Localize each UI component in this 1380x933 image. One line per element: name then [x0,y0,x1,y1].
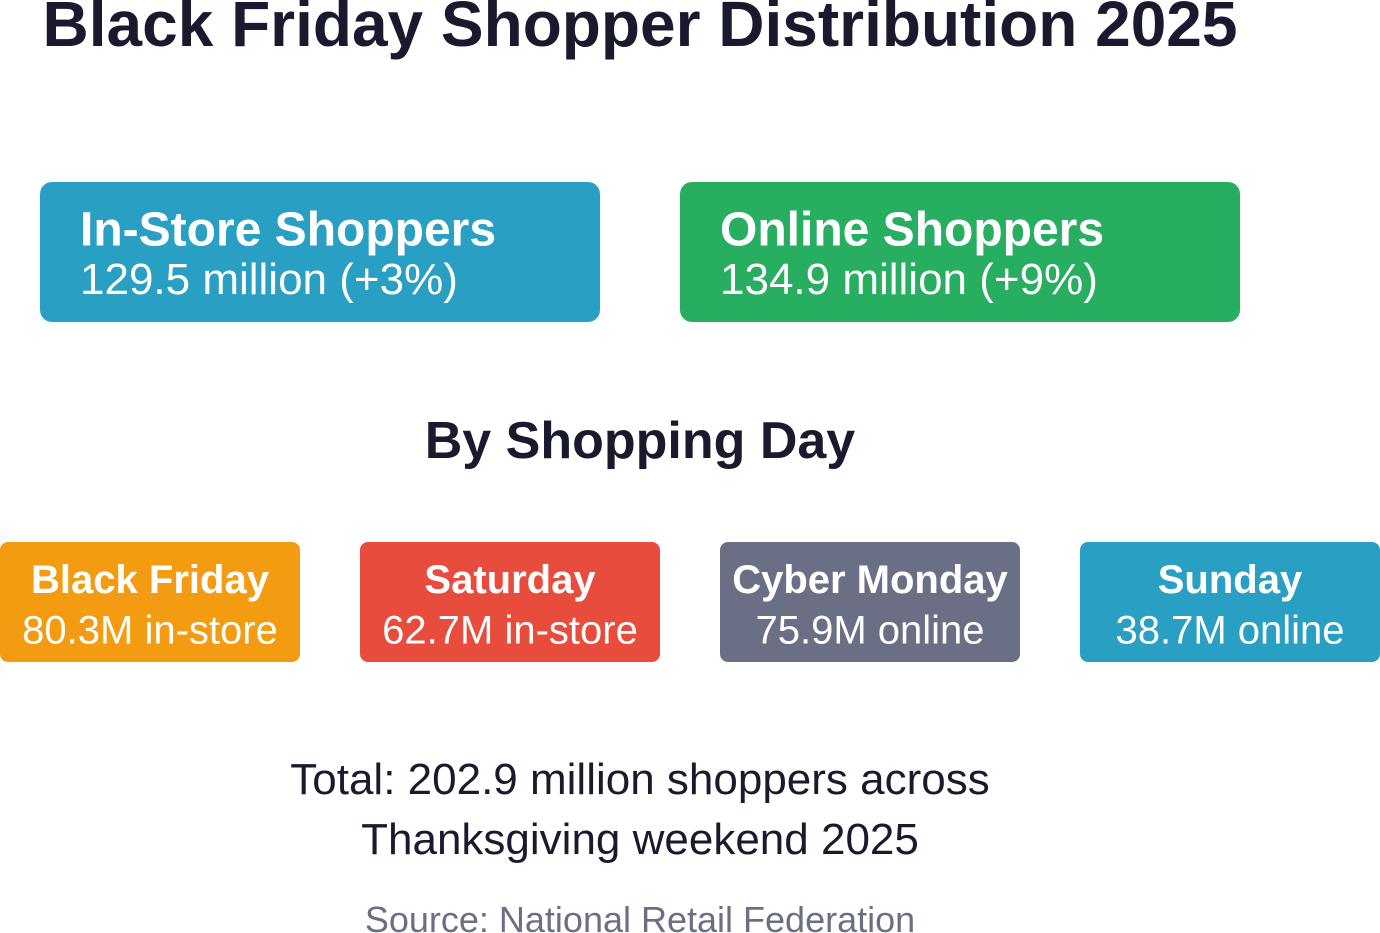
card: saturday: Saturday [424,558,596,602]
card: sunday [1080,542,1380,662]
panel: in-store shoppers [40,182,600,322]
total text: Total: 202.9 million shoppers across [290,755,990,804]
card: black friday: Black Friday [31,558,270,602]
heading: by shopping day: By Shopping Day [425,412,855,470]
card: cyber monday [720,542,1020,662]
total text: Thanksgiving weekend 2025 [361,815,919,864]
card: sunday: Sunday [1158,558,1303,602]
total text [290,755,990,864]
card: black friday: 80.3M in-store [22,608,278,652]
card: black friday [0,542,300,662]
panel: online shoppers: Online Shoppers [720,204,1104,256]
panel: in-store shoppers: In-Store Shoppers [80,204,496,256]
card: saturday [360,542,660,662]
card: cyber monday: 75.9M online [755,608,985,652]
panel: online shoppers [680,182,1240,322]
panel: online shoppers: 134.9 million (+9%) [720,255,1098,304]
card: cyber monday: Cyber Monday [732,558,1009,602]
card: sunday: 38.7M online [1115,608,1345,652]
panel: in-store shoppers: 129.5 million (+3%) [80,255,458,304]
card: saturday: 62.7M in-store [382,608,638,652]
